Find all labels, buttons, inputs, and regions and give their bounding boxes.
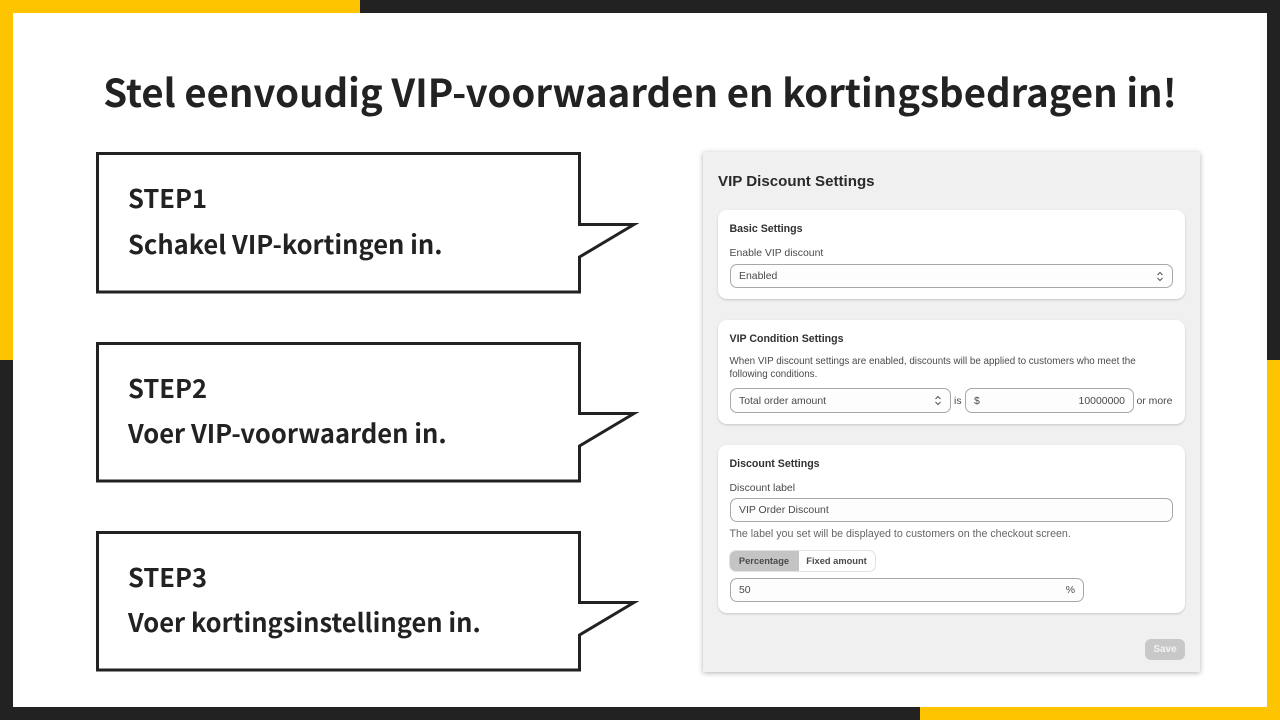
input: amount: 10000000 [1079, 396, 1125, 407]
input: amount [965, 388, 1134, 413]
card: basic settings: Enable VIP discount [730, 248, 823, 259]
card: VIP condition settings: following conditions. [730, 368, 817, 380]
input: percentage value [730, 578, 1084, 602]
card: VIP condition settings: is [954, 396, 962, 407]
title: Stel eenvoudig VIP-voorwaarden en kortingsbedragen in! [103, 64, 1177, 119]
card: discount settings [718, 445, 1185, 613]
toggle: percentage or fixed amount: Fixed amount [806, 556, 867, 566]
callout: step 1 [96, 152, 640, 294]
card: basic settings: Basic Settings [730, 223, 803, 235]
select: enabled: Enabled [739, 271, 777, 282]
save button: Save [1153, 644, 1177, 655]
input: percentage value: % [1066, 584, 1075, 596]
callout: step 2 [96, 342, 640, 482]
callout: step 3: Voer kortingsinstellingen in. [128, 603, 481, 640]
callout: step 3: STEP3 [128, 558, 207, 595]
card: VIP condition settings: When VIP discount settings are enabled, discounts will be applied to customers who meet the [730, 356, 1136, 367]
card: discount settings: The label you set will be displayed to customers on the checkout screen. [730, 528, 1071, 540]
select: total order amount: Total order amount [739, 396, 826, 407]
callout: step 2: Voer VIP-voorwaarden in. [128, 414, 447, 451]
card: discount settings: Discount Settings [730, 458, 820, 470]
select: enabled [730, 264, 1173, 288]
callout: step 3 [96, 531, 640, 672]
toggle: percentage or fixed amount: Percentage [739, 556, 789, 566]
input: discount label [730, 498, 1173, 522]
card: discount settings: Discount label [730, 483, 795, 494]
select: total order amount [730, 388, 951, 413]
panel heading: VIP Discount Settings [718, 173, 875, 190]
card: VIP condition settings: or more [1136, 396, 1172, 407]
toggle: percentage or fixed amount [730, 551, 874, 571]
callout: step 2: STEP2 [128, 369, 207, 406]
input: discount label: VIP Order Discount [739, 505, 829, 516]
callout: step 1: Schakel VIP-kortingen in. [128, 225, 443, 262]
callout: step 1: STEP1 [128, 179, 207, 216]
card: VIP condition settings [718, 320, 1185, 424]
input: amount: $ [974, 396, 980, 407]
card: VIP condition settings: VIP Condition Settings [730, 333, 843, 345]
input: percentage value: 50 [739, 584, 751, 596]
card: basic settings [718, 210, 1185, 299]
save button [1145, 639, 1185, 660]
panel: VIP discount settings screenshot [703, 152, 1200, 672]
